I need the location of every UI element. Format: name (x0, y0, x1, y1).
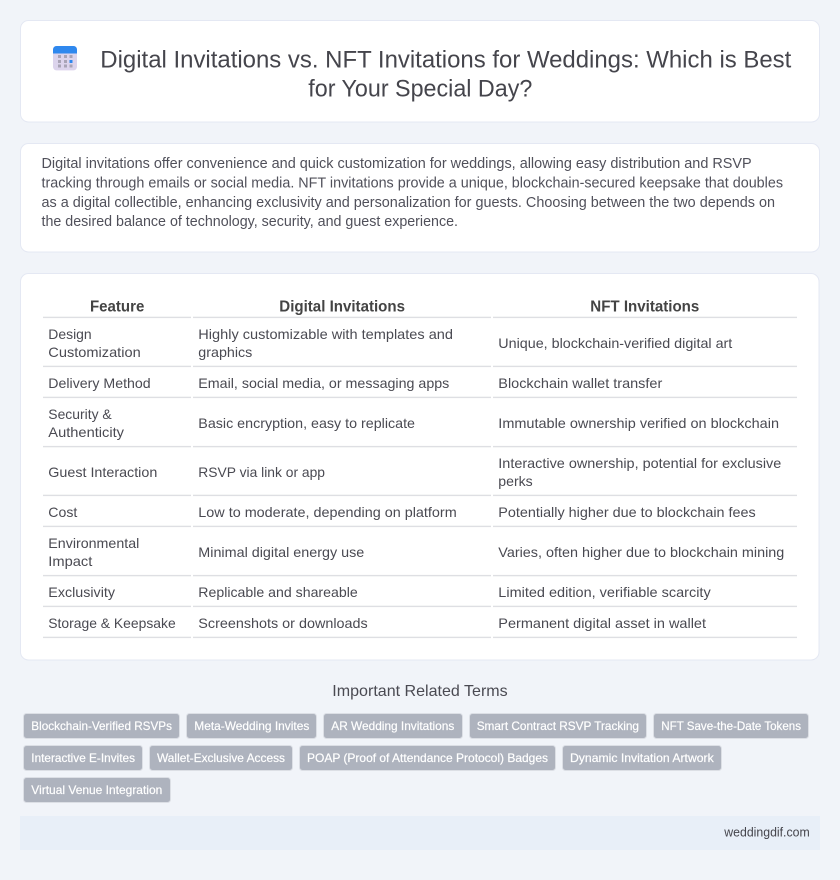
title: for Your Special Day? (308, 76, 532, 102)
row: security and authenticity: Basic encryption, easy to replicate (198, 415, 415, 431)
row: guest interaction: Interactive ownership, potential for exclusive (498, 455, 782, 471)
row: design customization: graphics (198, 344, 252, 360)
row: delivery method: Email, social media, or messaging apps (198, 375, 449, 391)
row: security and authenticity: Authenticity (48, 424, 124, 440)
text block: introduction paragraph: Digital invitations offer convenience and quick customization for weddings, allowing easy distribution and RSVP (42, 156, 752, 172)
row: environmental impact: Impact (48, 553, 92, 569)
tag: smart contract rsvp tracking: Smart Contract RSVP Tracking (477, 719, 639, 733)
footer: weddingdif.com (723, 825, 810, 840)
row: design customization: Unique, blockchain-verified digital art (498, 335, 732, 351)
tag: wallet-exclusive access: Wallet-Exclusive Access (157, 751, 285, 765)
row: storage and keepsake: Screenshots or downloads (198, 615, 368, 631)
title (100, 46, 792, 102)
row: cost: Cost (48, 504, 77, 520)
row: storage and keepsake: Permanent digital asset in wallet (498, 615, 706, 631)
tag: dynamic invitation artwork: Dynamic Invitation Artwork (570, 751, 715, 765)
row: storage and keepsake (43, 615, 797, 638)
row: exclusivity: Exclusivity (48, 584, 115, 600)
row: delivery method: Blockchain wallet transfer (498, 375, 663, 391)
row: storage and keepsake: Storage & Keepsake (48, 615, 176, 631)
row: cost: Potentially higher due to blockchain fees (498, 504, 756, 520)
tag: poap badges (300, 746, 556, 770)
row: environmental impact: Varies, often higher due to blockchain mining (498, 544, 784, 560)
row: delivery method: Delivery Method (48, 375, 151, 391)
table header row (43, 298, 797, 318)
tag: ar wedding invitations (324, 714, 462, 738)
title: Digital Invitations vs. NFT Invitations for Weddings: Which is Best (100, 46, 792, 74)
row: environmental impact (43, 535, 797, 576)
tag: nft save-the-date tokens (654, 714, 808, 738)
panel: introduction (20, 144, 820, 252)
row: delivery method (43, 375, 797, 398)
row: guest interaction (43, 455, 797, 496)
row: design customization: Highly customizable with templates and (198, 326, 453, 342)
row: guest interaction: Guest Interaction (48, 464, 157, 480)
tag: meta-wedding invites: Meta-Wedding Invites (194, 719, 309, 733)
tag: poap badges: POAP (Proof of Attendance Protocol) Badges (307, 751, 548, 765)
row: security and authenticity: Immutable ownership verified on blockchain (498, 415, 779, 431)
tag: virtual venue integration (24, 778, 170, 802)
text block: introduction paragraph: the desired balance of technology, security, and guest experience. (42, 214, 458, 230)
row: exclusivity (43, 584, 797, 607)
tag: interactive e-invites: Interactive E-Invites (31, 751, 135, 765)
row: design customization (43, 326, 797, 367)
text block: introduction paragraph: as a digital collectible, enhancing exclusivity and personalization for guests. Choosing between the two depends on (42, 195, 775, 211)
tag: dynamic invitation artwork (562, 746, 722, 770)
text block: introduction paragraph: tracking through emails or social media. NFT invitations provide a unique, blockchain-secured keepsake that doubles (42, 175, 783, 191)
tag: blockchain-verified rsvps (24, 714, 180, 738)
table header row: NFT Invitations (590, 298, 699, 316)
tag: smart contract rsvp tracking (470, 714, 646, 738)
icon: calendar (53, 46, 77, 70)
row: security and authenticity: Security & (48, 406, 112, 422)
row: guest interaction: perks (498, 473, 533, 489)
tag: ar wedding invitations: AR Wedding Invitations (331, 719, 454, 733)
tag: nft save-the-date tokens: NFT Save-the-Date Tokens (661, 719, 801, 733)
row: environmental impact: Environmental (48, 535, 139, 551)
row: cost: Low to moderate, depending on platform (198, 504, 457, 520)
row: exclusivity: Limited edition, verifiable scarcity (498, 584, 711, 600)
tag: meta-wedding invites (186, 714, 316, 738)
row: environmental impact: Minimal digital energy use (198, 544, 365, 560)
row: design customization: Design (48, 326, 92, 342)
tag: interactive e-invites (24, 746, 142, 770)
tag: blockchain-verified rsvps: Blockchain-Verified RSVPs (31, 719, 172, 733)
row: exclusivity: Replicable and shareable (198, 584, 358, 600)
tag list: related terms (24, 714, 808, 802)
footer (20, 816, 820, 850)
panel: comparison table (20, 274, 819, 660)
table header row: Digital Invitations (279, 298, 405, 316)
tag: wallet-exclusive access (150, 746, 292, 770)
tag: virtual venue integration: Virtual Venue Integration (31, 783, 162, 797)
panel: header (20, 20, 820, 122)
row: security and authenticity (43, 406, 797, 447)
row: design customization: Customization (48, 344, 141, 360)
table header row: Feature (90, 298, 144, 316)
row: guest interaction: RSVP via link or app (198, 464, 325, 480)
heading: important related terms: Important Related Terms (332, 683, 508, 700)
row: cost (43, 504, 797, 527)
text block: introduction paragraph (42, 156, 783, 230)
